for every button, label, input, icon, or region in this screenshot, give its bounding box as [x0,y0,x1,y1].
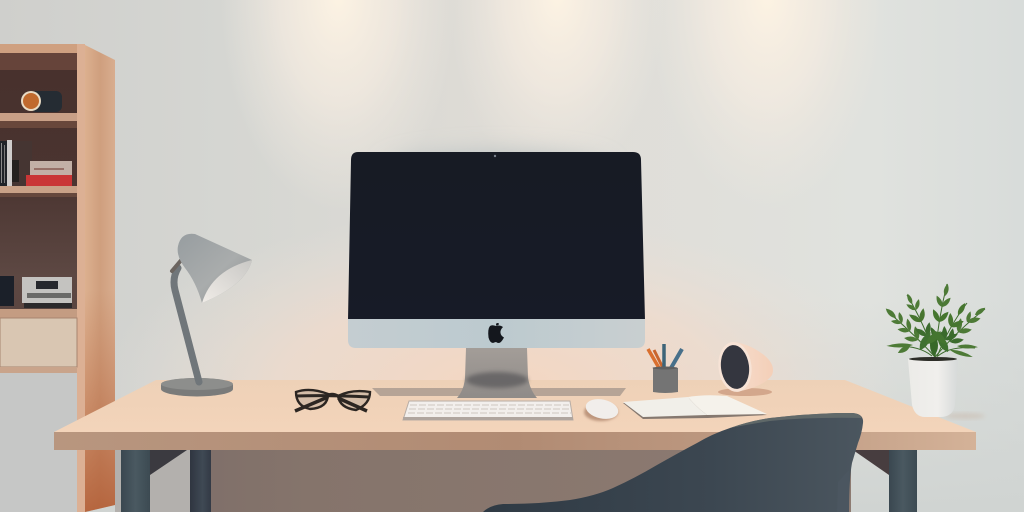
monitor screen [348,152,645,320]
desk lamp [161,234,252,396]
shelf back panel [0,45,78,375]
shelf top board [0,44,85,53]
office chair [483,413,863,512]
glasses [295,390,370,411]
pen cup [648,344,682,393]
audio receiver [0,276,72,308]
lamp shade [178,234,252,303]
lamp arm [174,268,199,382]
potted plant [884,283,987,419]
apple logo [488,323,504,343]
round desk object [716,340,773,396]
shelf boards [0,113,77,121]
shelf side panel [85,45,115,512]
plant pot [908,359,958,417]
notebook [623,395,767,419]
speaker object [21,91,62,112]
left leg bracket [150,450,187,475]
mouse [584,396,620,422]
monitor chin [348,319,645,348]
lamp base [161,378,233,396]
monitor shadow on desk [372,388,626,396]
desk top surface [54,380,976,432]
desk front edge [54,432,976,450]
monitor stand [457,348,537,398]
desk legs [121,450,150,512]
plant leaves [884,283,987,359]
right leg bracket [853,450,889,475]
keyboard [403,401,573,420]
lower wall under shelf [0,373,77,512]
drawer [0,318,77,367]
desk [54,380,976,512]
bookshelf [0,44,115,512]
stand shadow [466,372,528,388]
books [0,140,72,186]
monitor [348,152,645,398]
